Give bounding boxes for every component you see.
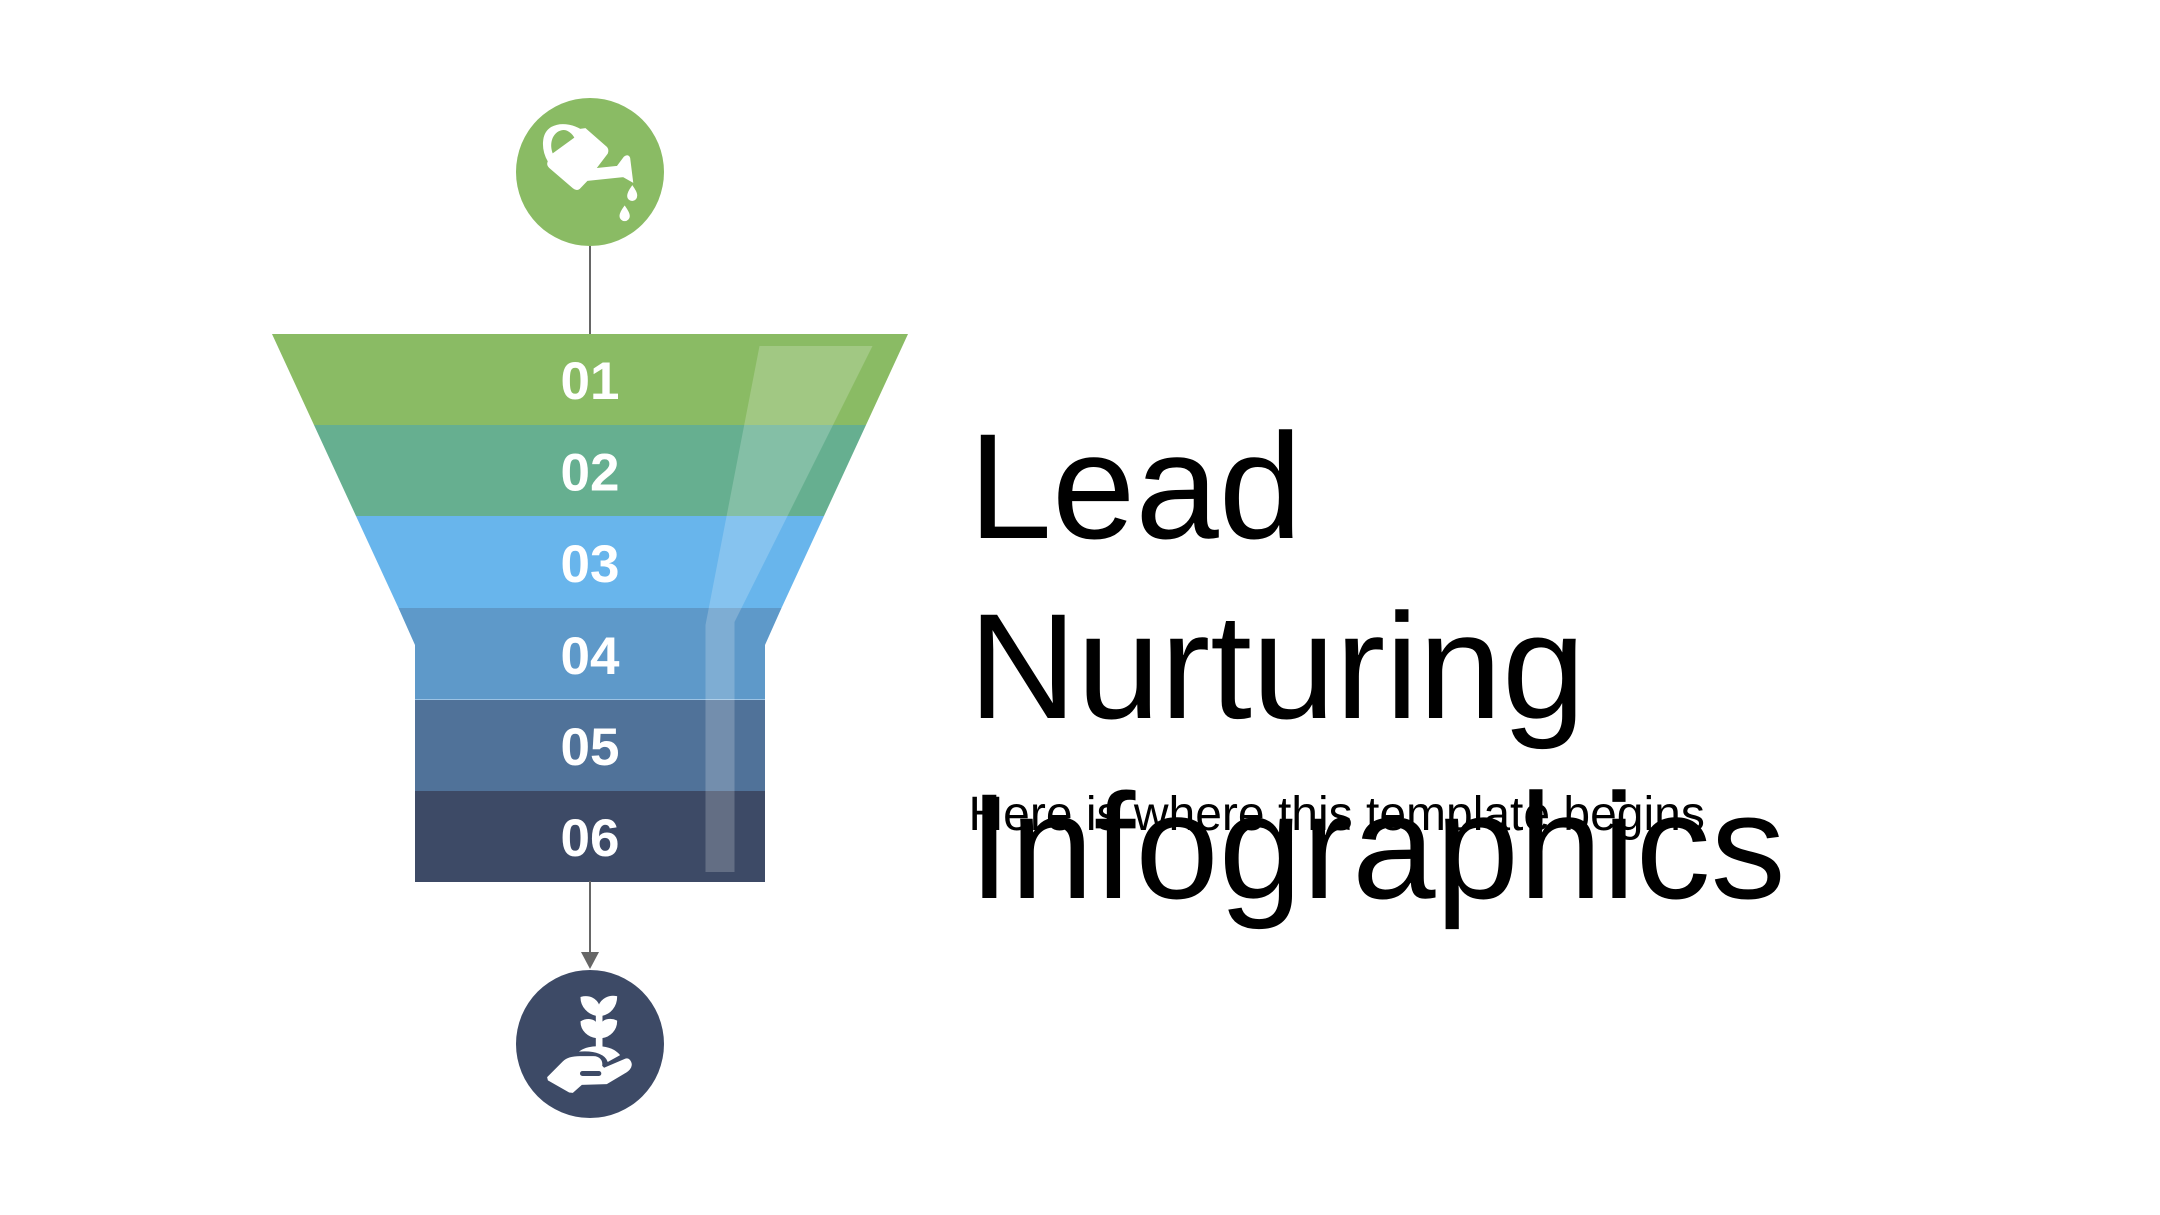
subtitle: Here is where this template begins: [968, 788, 1705, 841]
funnel row 06: [415, 791, 765, 882]
icon: hand holding plant in navy circle: [516, 970, 664, 1118]
funnel row 05: [415, 699, 765, 791]
funnel row 02: [314, 425, 866, 516]
funnel row 04: 04: [561, 627, 620, 686]
funnel row 05: 05: [561, 718, 619, 777]
arrow: funnel to bottom icon: [581, 881, 599, 969]
funnel: [272, 334, 908, 882]
icon: watering can in green circle: [516, 98, 664, 246]
funnel row 03: [356, 516, 824, 608]
funnel row 02: 02: [561, 444, 619, 502]
funnel row 01: 01: [561, 352, 619, 411]
title: Nurturing: [968, 582, 1585, 750]
title: [968, 402, 1786, 930]
funnel row 03: 03: [561, 535, 619, 594]
connector line: top icon to funnel: [589, 246, 591, 335]
title: Lead: [968, 402, 1302, 570]
funnel glass highlight: [706, 346, 872, 872]
funnel row 04: [398, 608, 782, 699]
title: Infographics: [968, 762, 1786, 930]
funnel row 01: [272, 334, 908, 425]
funnel row 06: 06: [561, 809, 619, 868]
